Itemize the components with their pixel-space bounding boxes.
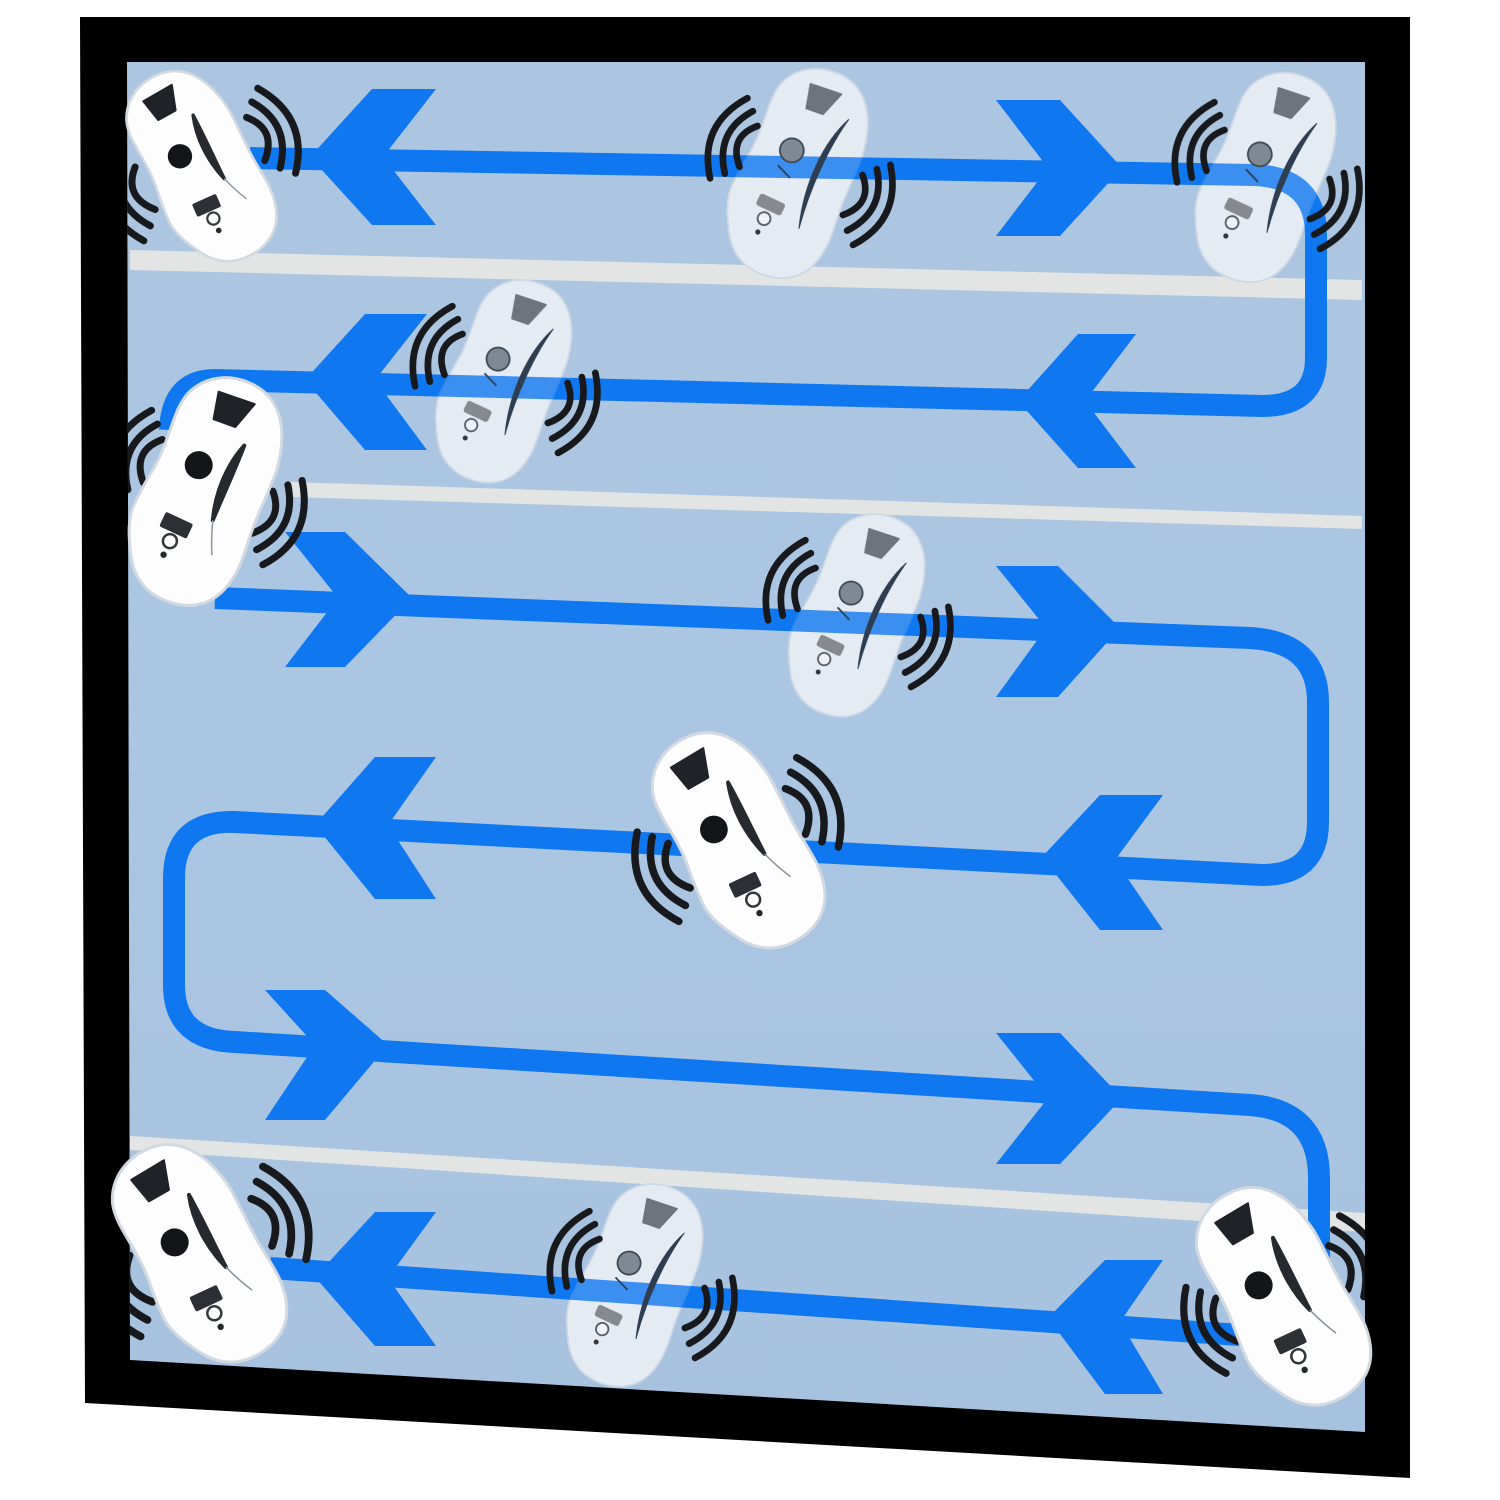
cleaning route line: [170, 158, 1319, 1335]
opaque robots: key positions: [96, 52, 1389, 1427]
translucent robots: bodies: [412, 53, 1363, 1402]
direction arrows: [265, 89, 1163, 1394]
translucent robots: glass overlay on route: [412, 53, 1363, 1402]
sonar signal arcs: [80, 81, 1396, 1381]
translucent robots: details: [450, 80, 1326, 1359]
window glass: [127, 62, 1365, 1432]
window divider bands: [130, 250, 1365, 1232]
